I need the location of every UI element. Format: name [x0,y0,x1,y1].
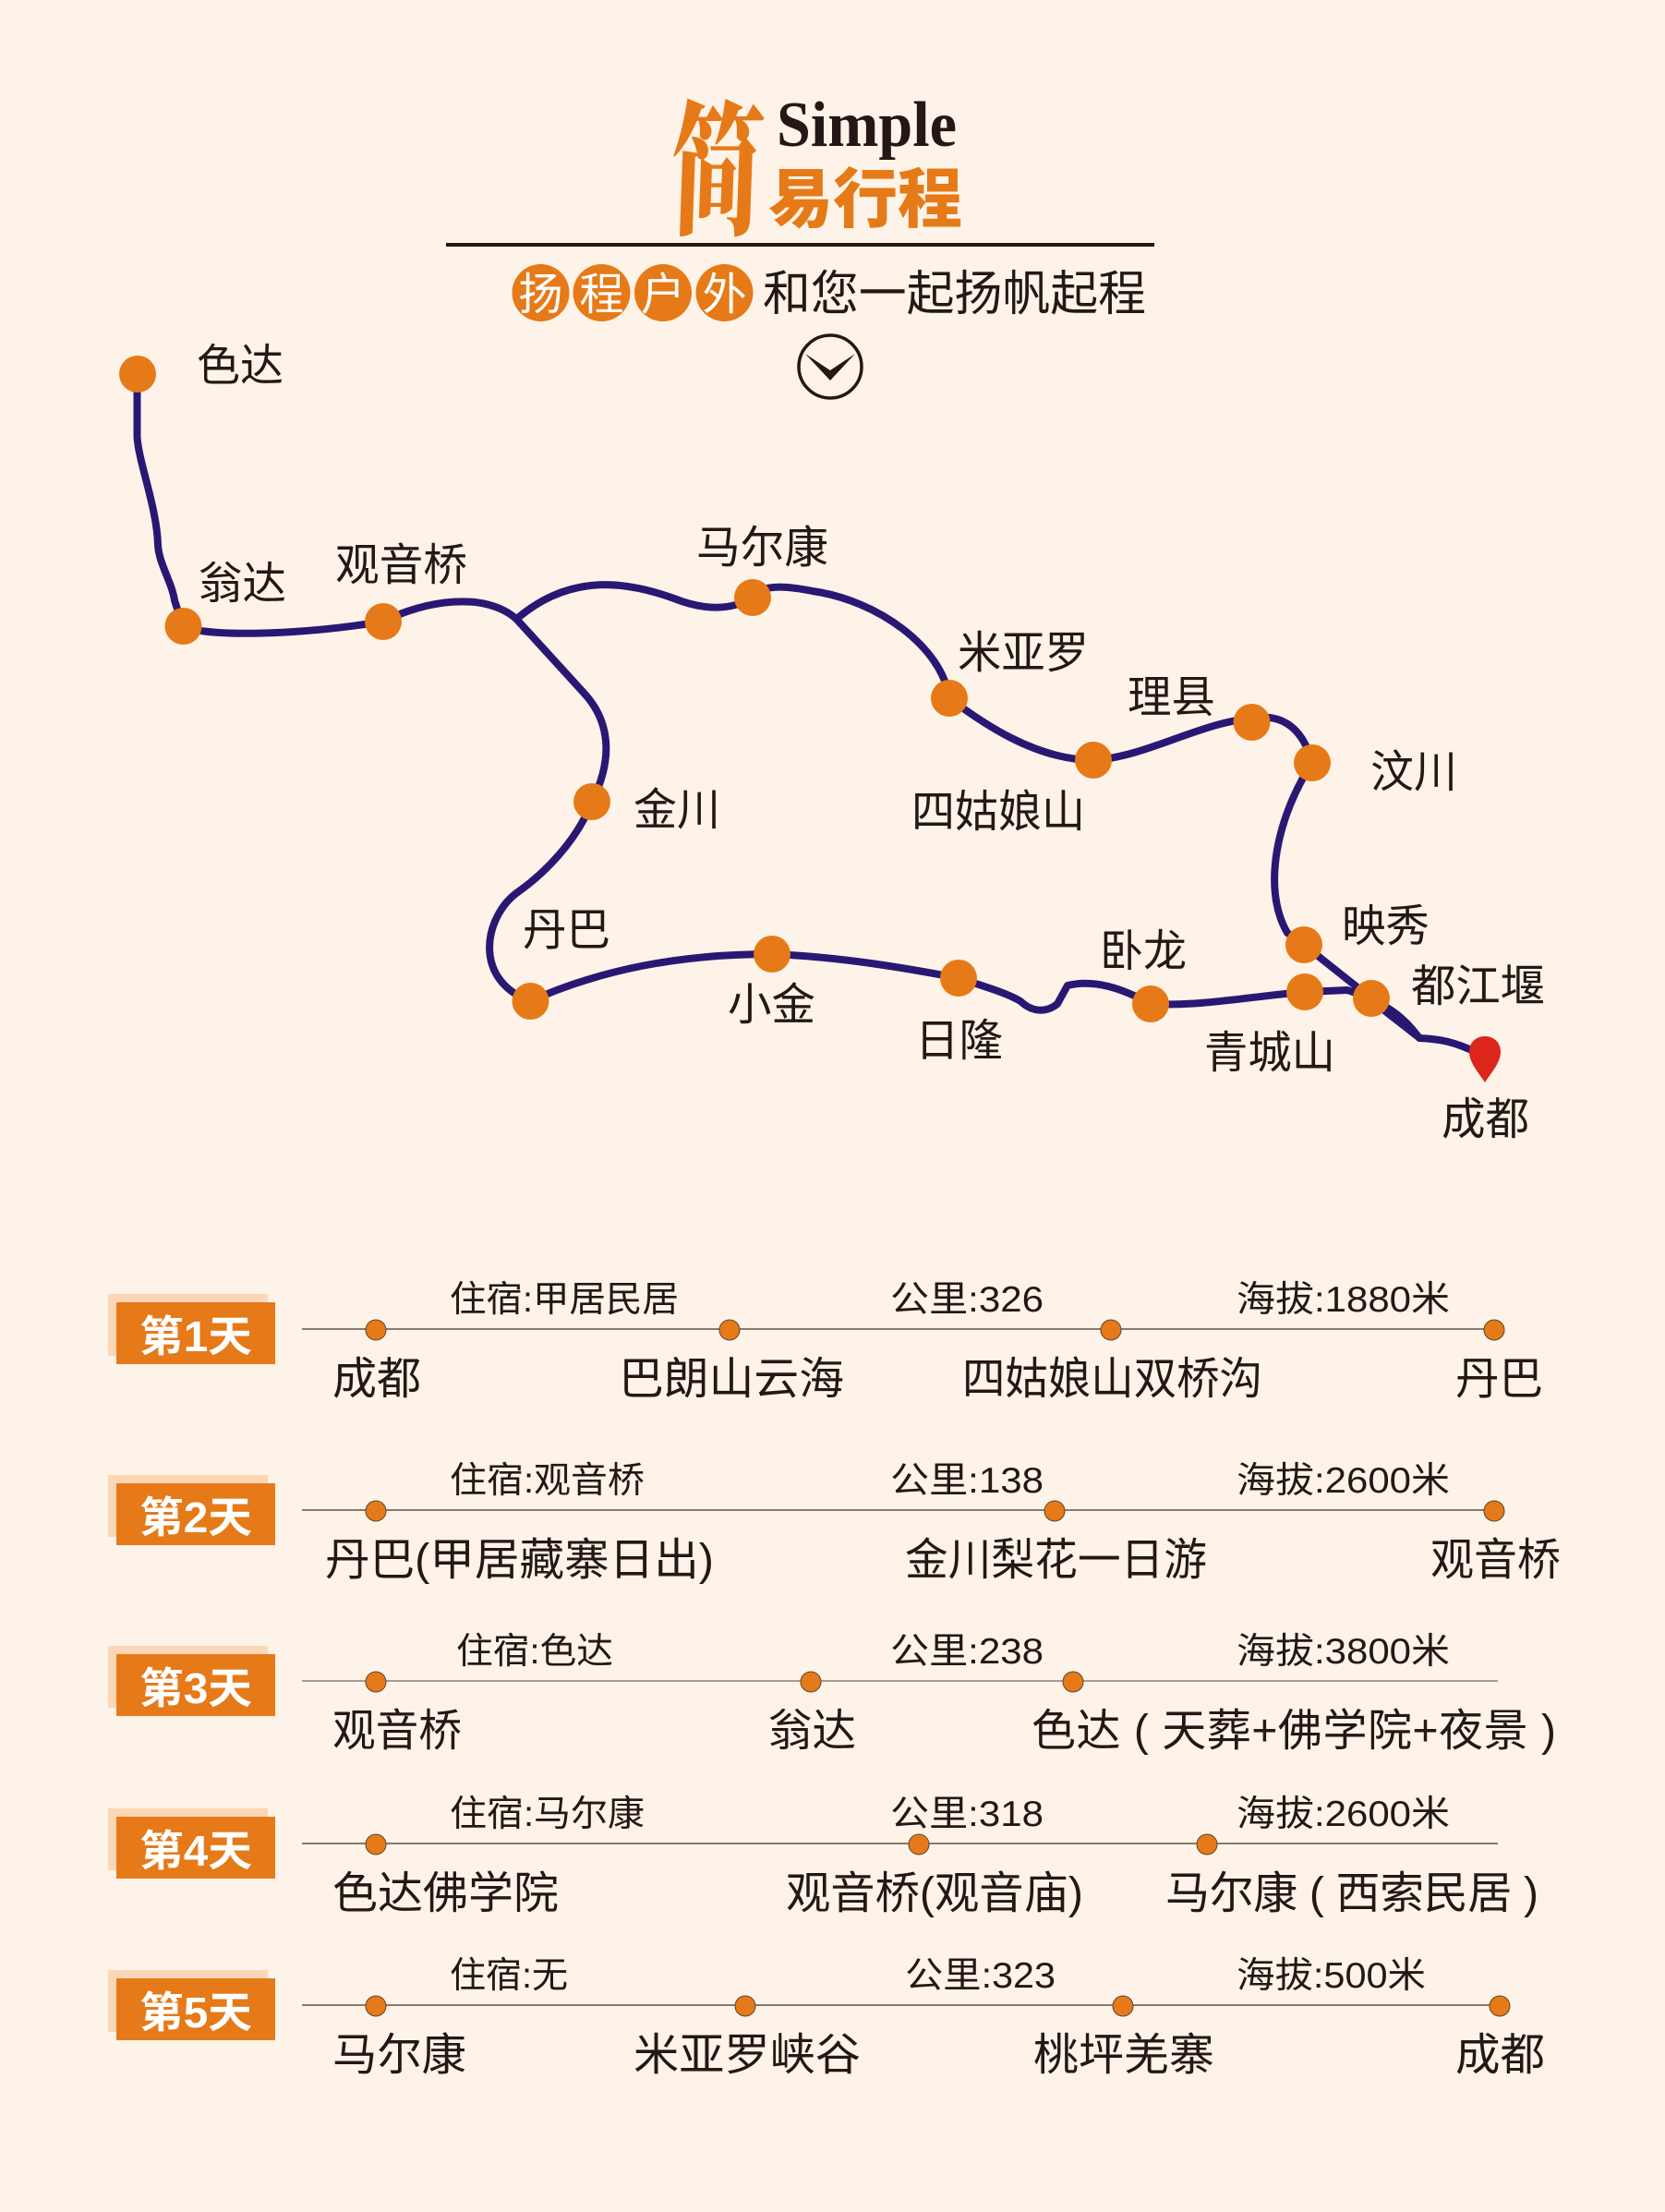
day 4 stats: 公里:318 [890,1795,1044,1834]
day 4 stats: 住宿:马尔康 [450,1795,645,1834]
day 3 stops: 观音桥 [332,1707,462,1756]
day 3 row [108,1632,1556,1756]
day 5 stops: 米亚罗峡谷 [633,2031,861,2080]
day 5 stops [332,2031,1545,2080]
brand badges: 扬 [518,271,563,320]
day 5 stats: 公里:323 [905,1956,1056,1996]
day 1 timeline [302,1320,1504,1340]
map labels: 米亚罗 [958,629,1089,678]
day 1 stops: 巴朗山云海 [619,1355,844,1404]
day 4 timeline [302,1834,1498,1855]
title text: easy itinerary: 易行程 [768,163,962,236]
day 1 badge [108,1294,275,1364]
day 1 stops: 成都 [332,1355,421,1404]
map labels: 四姑娘山 [911,788,1085,837]
brand badges: 程 [579,271,624,320]
title block [667,56,962,264]
day 5 badge: 第5天 [139,1988,252,2037]
brand badges [512,264,754,321]
day 4 stops [332,1869,1538,1918]
day 1 stats: 公里:326 [890,1280,1044,1320]
map labels: 色达 [197,342,284,391]
title word: Simple: Simple [777,90,957,161]
day 3 stats: 住宿:色达 [456,1632,613,1672]
map labels: 金川 [633,786,720,835]
day 2 row [108,1461,1561,1585]
map labels: 丹巴 [523,906,610,955]
day 4 stops: 色达佛学院 [332,1869,559,1918]
day 3 stats [456,1632,1450,1672]
day 2 timeline [302,1501,1504,1521]
day 4 stops: 观音桥(观音庙) [786,1869,1083,1918]
day 2 stops [325,1536,1561,1585]
day 3 badge [108,1646,275,1716]
day 2 stats [450,1461,1450,1501]
day 4 stats: 海拔:2600米 [1237,1795,1450,1834]
day 4 badge [108,1808,275,1879]
day 5 badge [108,1970,275,2040]
day 1 stats: 海拔:1880米 [1237,1280,1450,1320]
day 1 row [108,1280,1543,1404]
day 3 stops: 翁达 [768,1707,856,1756]
day 3 stats: 公里:238 [890,1632,1044,1672]
day 2 stops: 丹巴(甲居藏寨日出) [325,1536,714,1585]
day 1 stops [332,1355,1543,1404]
day 2 stats: 海拔:2600米 [1237,1461,1450,1501]
map labels: 马尔康 [696,524,828,573]
day 3 timeline [302,1672,1498,1692]
day 2 stats: 住宿:观音桥 [450,1461,645,1501]
day 2 badge [108,1475,275,1545]
day 5 timeline [302,1996,1510,2016]
brand badges: 外 [702,271,747,320]
day 1 stops: 四姑娘山双桥沟 [962,1355,1262,1404]
map labels: 日隆 [915,1017,1003,1066]
slogan text: 和您一起扬帆起程 [763,268,1146,321]
map labels: 都江堰 [1411,962,1545,1011]
day 4 row [108,1795,1538,1918]
day 5 row [108,1956,1545,2080]
day 4 badge: 第4天 [139,1827,252,1875]
day 2 stops: 金川梨花一日游 [905,1536,1207,1585]
map labels: 翁达 [199,560,286,609]
day 5 stops: 成都 [1455,2031,1545,2080]
title glyph: jian: 简 [667,56,768,264]
map labels: 理县 [1128,673,1215,722]
map labels: 小金 [728,981,815,1030]
route map [119,342,1545,1144]
icon: circled down arrow [799,335,862,398]
day 1 stops: 丹巴 [1455,1355,1543,1404]
day 5 stats [450,1956,1426,1996]
day 5 stops: 马尔康 [332,2031,466,2080]
day 5 stops: 桃坪羌寨 [1033,2031,1214,2080]
map labels: 青城山 [1204,1029,1335,1078]
icon: red map pin [1469,1036,1501,1082]
slogan [512,264,1146,321]
day 5 stats: 海拔:500米 [1237,1956,1426,1996]
map labels: 映秀 [1342,902,1430,951]
title rule [446,243,1154,247]
map labels: 汶川 [1370,748,1457,797]
brand badges: 户 [641,271,685,320]
day 1 badge: 第1天 [139,1312,252,1360]
day 2 stops: 观音桥 [1430,1536,1561,1585]
day 2 stats: 公里:138 [890,1461,1044,1501]
day 1 stats: 住宿:甲居民居 [450,1280,679,1320]
map labels: 观音桥 [335,541,467,590]
day 3 stops: 色达 ( 天葬+佛学院+夜景 ) [1032,1707,1556,1756]
day 3 badge: 第3天 [139,1664,252,1712]
map labels: 成都 [1442,1095,1529,1144]
day 1 stats [450,1280,1450,1320]
map labels: 卧龙 [1100,927,1187,976]
day 2 badge: 第2天 [139,1493,252,1541]
map labels [197,342,1545,1144]
route line [137,374,1478,1053]
day 5 stats: 住宿:无 [450,1956,568,1996]
day 4 stats [450,1795,1450,1834]
day 4 stops: 马尔康 ( 西索民居 ) [1165,1869,1538,1918]
route stops [119,356,1390,1022]
day 3 stats: 海拔:3800米 [1237,1632,1450,1672]
day 3 stops [332,1707,1556,1756]
